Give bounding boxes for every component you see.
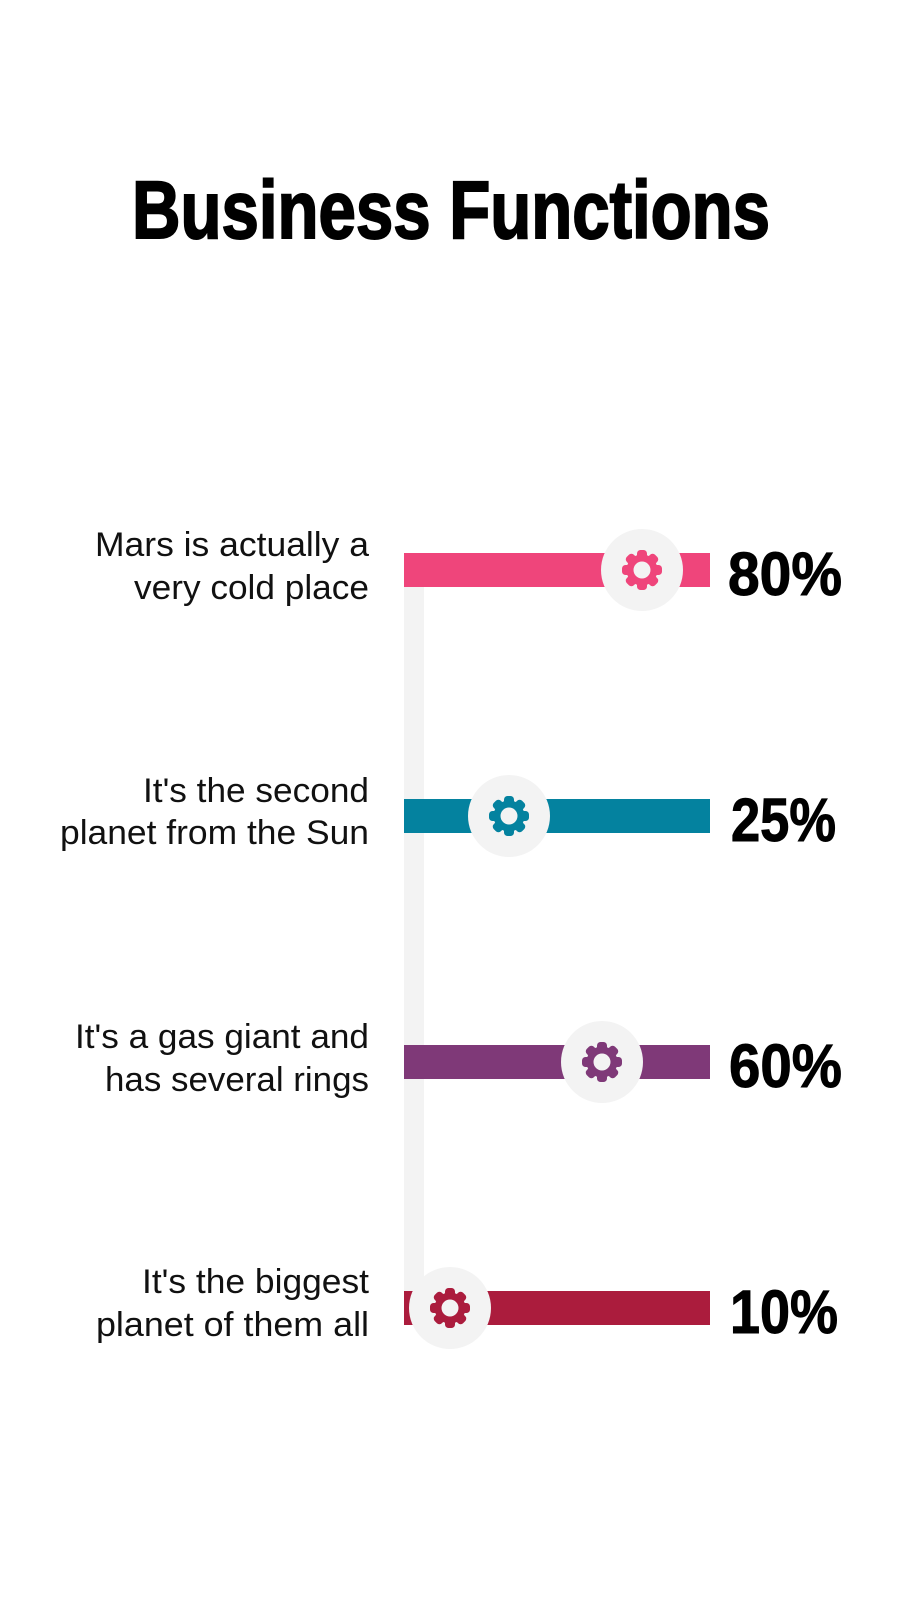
label: Saturn: It's a gas giant and bbox=[75, 1018, 369, 1056]
bar: pink bbox=[404, 553, 710, 587]
bar: crimson bbox=[404, 1291, 710, 1325]
icon: gear pink bbox=[601, 529, 683, 611]
row: 25% bbox=[60, 772, 836, 857]
vertical connector bbox=[404, 587, 424, 1308]
value: 25%: 25% bbox=[731, 786, 836, 854]
label: Mars bbox=[95, 526, 370, 607]
icon: gear purple bbox=[561, 1021, 643, 1103]
label: Mars: Mars is actually a bbox=[95, 526, 370, 564]
label: Saturn: has several rings bbox=[105, 1061, 369, 1099]
label: Venus: planet from the Sun bbox=[60, 814, 369, 852]
value: 60%: 60% bbox=[729, 1032, 842, 1100]
icon: gear teal bbox=[468, 775, 550, 857]
row: 80% bbox=[95, 526, 842, 611]
title: Business Functions bbox=[132, 165, 770, 256]
label: Mars: very cold place bbox=[134, 569, 369, 607]
label: Venus bbox=[60, 772, 369, 852]
bar: teal bbox=[404, 799, 710, 833]
label: Saturn bbox=[75, 1018, 369, 1099]
label: Jupiter: planet of them all bbox=[96, 1306, 369, 1344]
label: Jupiter: It's the biggest bbox=[142, 1263, 369, 1301]
label: Jupiter bbox=[96, 1263, 369, 1344]
row: 60% bbox=[75, 1018, 842, 1103]
label: Venus: It's the second bbox=[143, 772, 369, 810]
bar: purple bbox=[404, 1045, 710, 1079]
icon: gear crimson bbox=[409, 1267, 491, 1349]
value: 80%: 80% bbox=[728, 540, 842, 608]
row: 10% bbox=[96, 1263, 838, 1349]
value: 10%: 10% bbox=[730, 1278, 838, 1346]
